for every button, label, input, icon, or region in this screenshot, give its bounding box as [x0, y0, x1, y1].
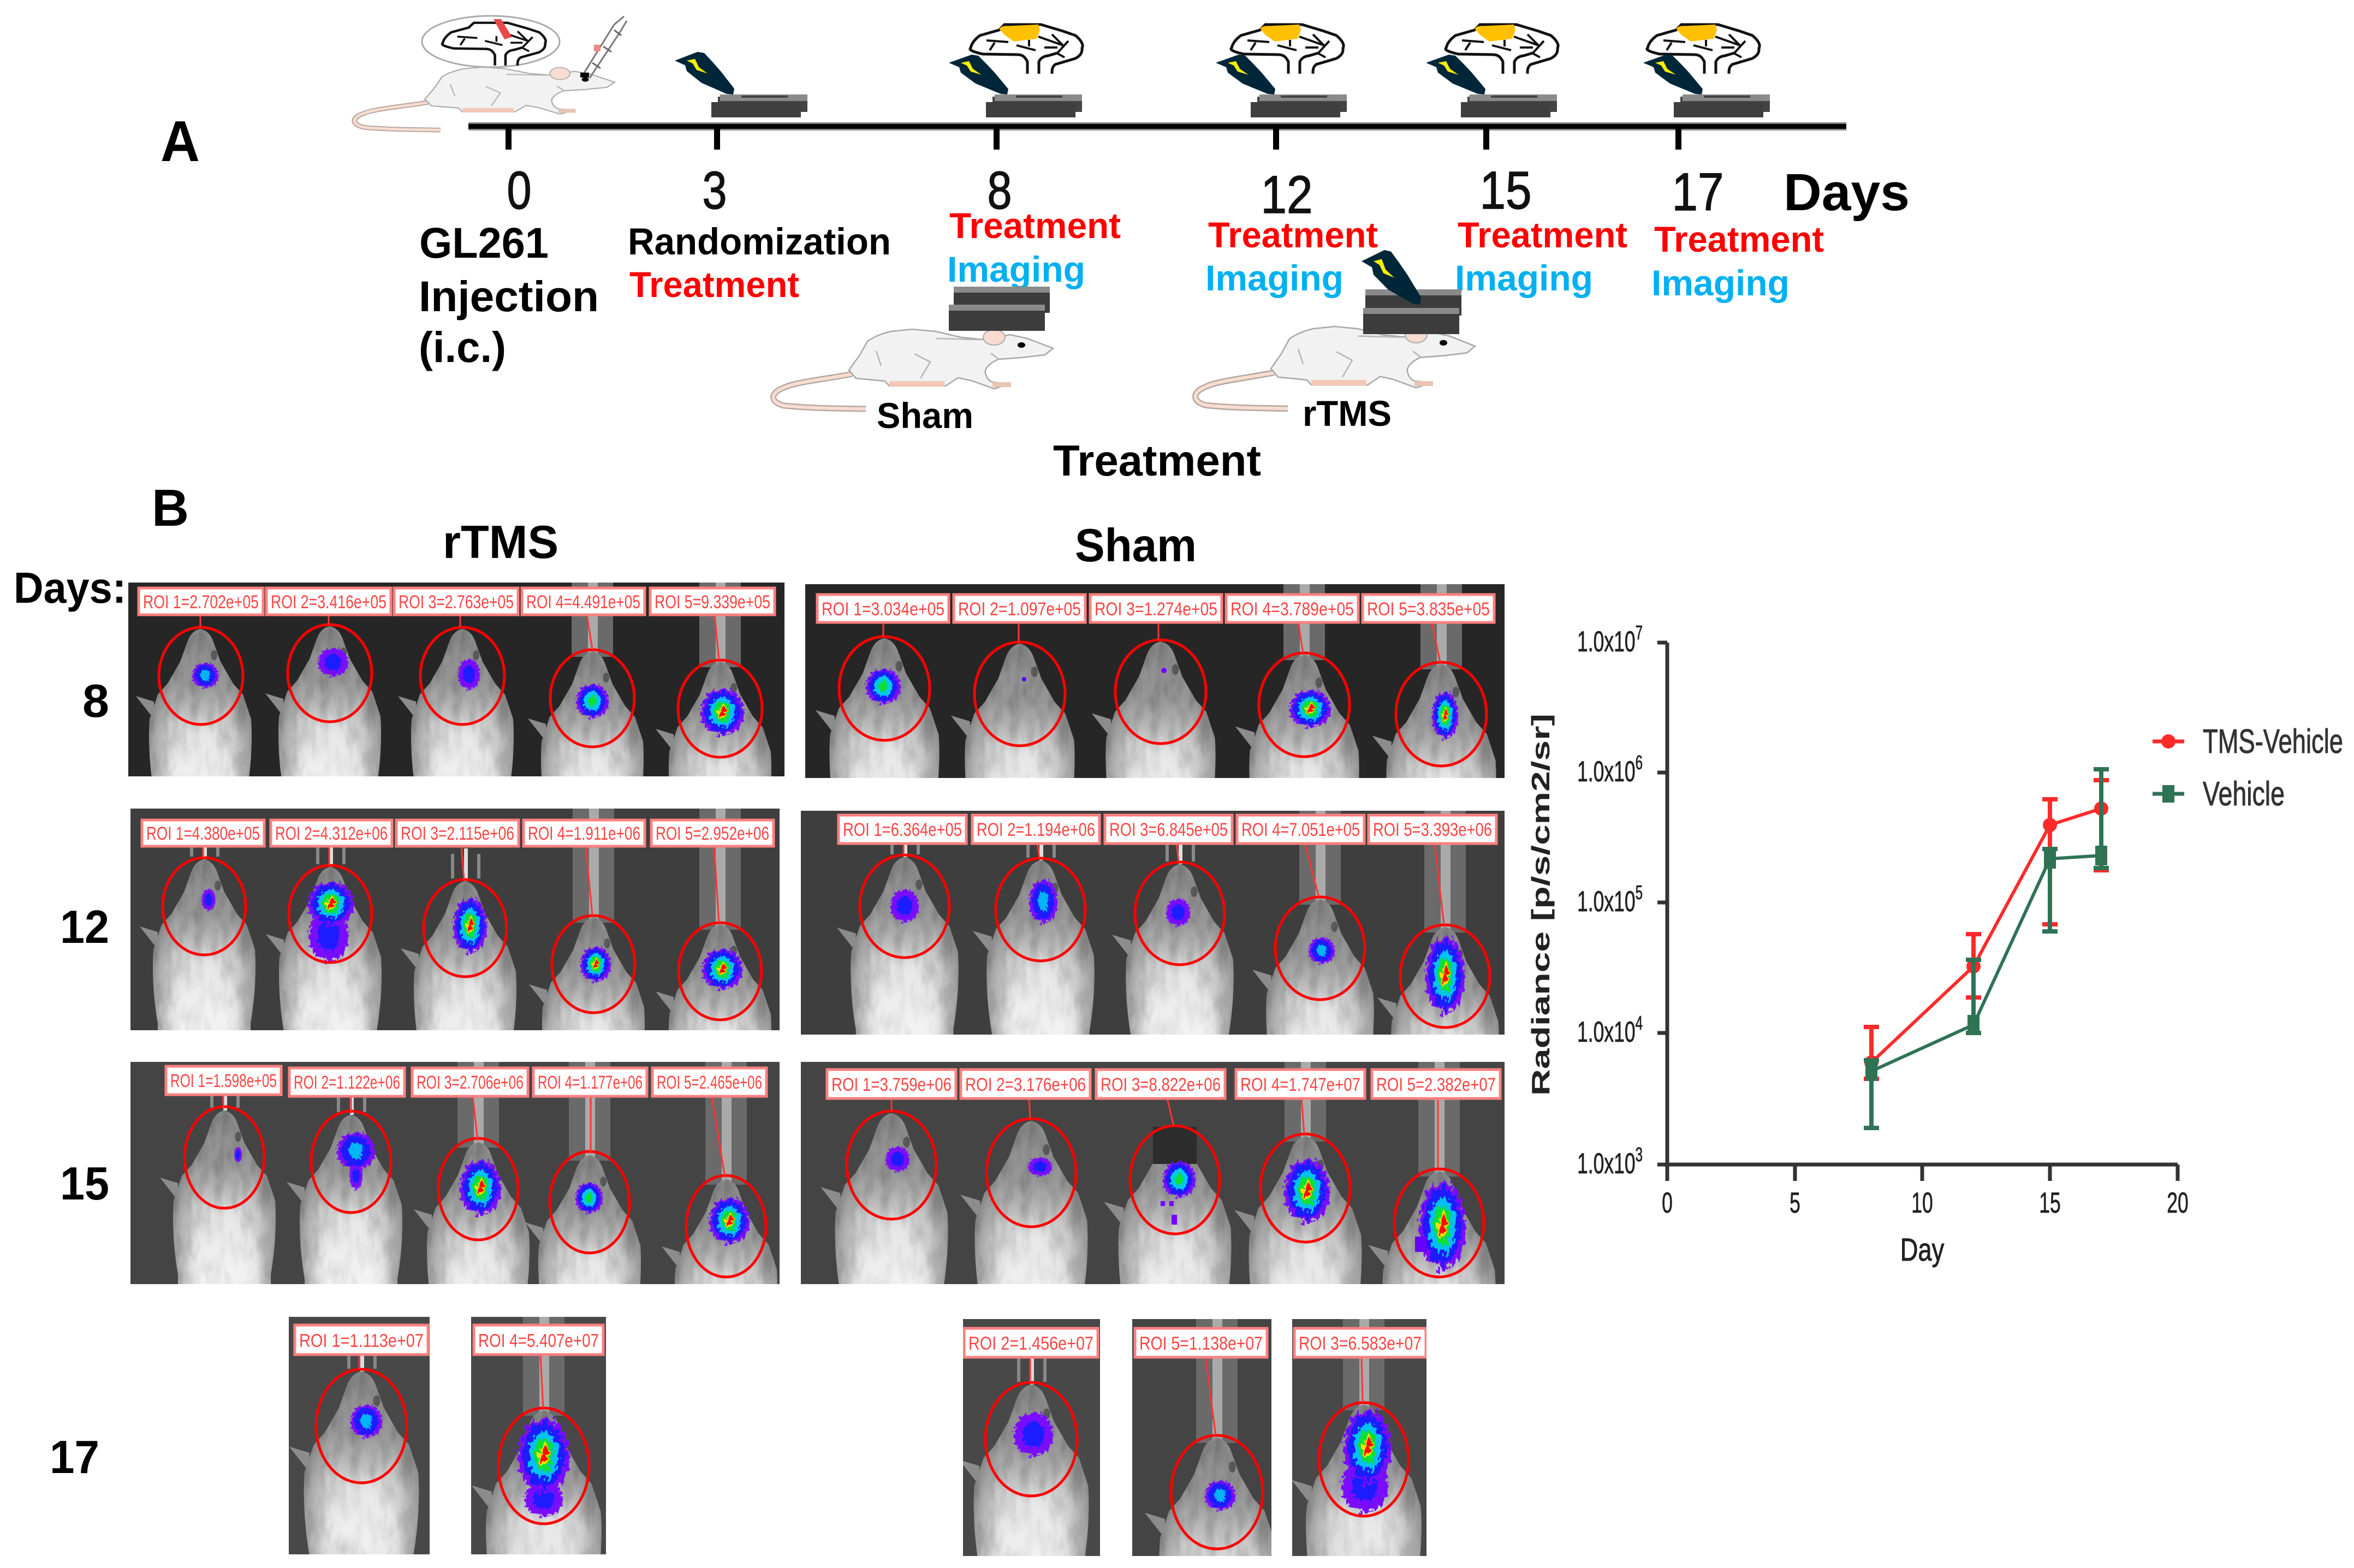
icon: rTMS mouse with coil and bolt [1195, 250, 1475, 408]
text: day 8: Imaging [947, 249, 1085, 289]
icon: coil and brain day 15 [1426, 25, 1558, 117]
series: TMS-Vehicle [1864, 780, 2109, 1079]
icon: coil and brain day 12 [1216, 25, 1347, 117]
row labels: imaging days: 8 [82, 675, 109, 727]
x tick labels: 20 [2167, 1186, 2189, 1219]
day numbers [507, 161, 1724, 224]
mouse 3 ROI [396, 820, 519, 1110]
row labels: imaging days: 12 [60, 901, 109, 953]
series: Vehicle [1864, 769, 2109, 1128]
legend [2153, 723, 2343, 813]
y tick labels: 1.0x10 [1577, 1147, 1636, 1180]
mouse 5 ROI [650, 482, 775, 891]
icon: coil and brain day 17 [1643, 25, 1770, 117]
mouse 3 ROI: ROI 3=2.763e+05 [399, 592, 514, 613]
mouse 5 ROI [1369, 747, 1499, 1168]
y axis title: Radiance [p/s/cm2/sr] [1526, 714, 1555, 1096]
mouse 3 ROI [1090, 595, 1222, 887]
mouse 1 ROI [837, 815, 966, 1098]
mouse 4 ROI [525, 975, 647, 1385]
mouse 2 ROI: ROI 2=1.194e+06 [977, 819, 1095, 840]
icon: tumour injection mouse [354, 16, 627, 130]
x axis title: Day [1900, 1233, 1944, 1268]
row labels: imaging days [50, 675, 109, 1483]
text: day 17 [1651, 219, 1824, 303]
y tick labels: 7 [1636, 622, 1643, 644]
text: day 17: Treatment [1654, 219, 1824, 259]
mouse 2 ROI [951, 595, 1085, 889]
y tick labels: 5 [1636, 882, 1643, 904]
column heading: Sham: Sham [1075, 520, 1197, 572]
day numbers: 0 [507, 161, 532, 220]
axes [1657, 643, 2178, 1181]
mouse 1 ROI: ROI 1=1.598e+05 [170, 1071, 277, 1091]
text: day 3: Randomization [628, 221, 891, 263]
heading: A: A [160, 109, 200, 174]
panel: rTMS day 17 image 2 [471, 1317, 606, 1554]
legend: Vehicle [2203, 775, 2285, 813]
text: GL261 injection: (i.c.) [419, 323, 506, 371]
mouse 3 ROI [1105, 815, 1234, 1105]
mouse 5 ROI [651, 744, 774, 1154]
mouse 3 ROI: ROI 3=1.274e+05 [1095, 599, 1217, 620]
text: day 12: Treatment [1208, 215, 1378, 255]
mouse 2 ROI [265, 588, 391, 856]
text: GL261 injection: Injection [419, 272, 599, 320]
text: day 17: Imaging [1651, 263, 1790, 303]
panel: rTMS day 12 images [130, 809, 780, 1030]
mouse 4 ROI [524, 737, 645, 1147]
mouse 4 ROI: ROI 4=3.789e+05 [1230, 599, 1354, 620]
y tick labels: 1.0x10 [1577, 885, 1636, 918]
mouse 1 ROI: ROI 1=6.364e+05 [843, 819, 962, 840]
panel: Sham day 15 images [801, 1062, 1505, 1284]
text: GL261 injection: GL261 [419, 218, 549, 267]
icon: sham mouse with coil [773, 287, 1053, 409]
panel: rTMS day 17 image 1 [289, 1317, 430, 1554]
mouse 2 ROI: ROI 2=3.176e+06 [965, 1074, 1086, 1095]
caption: Treatment: Treatment [1053, 436, 1261, 485]
panel: Sham day 17 image 1 [963, 1319, 1100, 1556]
text: day 8: Treatment [949, 205, 1121, 246]
text: day 15 [1455, 215, 1627, 298]
text: GL261 injection [419, 218, 599, 371]
mouse 4 ROI: ROI 4=1.177e+06 [538, 1072, 643, 1093]
mouse 4 ROI: ROI 4=1.747e+07 [1240, 1074, 1360, 1095]
x tick labels: 15 [2039, 1186, 2061, 1219]
mouse 5 ROI [1368, 991, 1500, 1423]
panel: rTMS day 15 images [130, 1062, 780, 1284]
mouse 2 ROI [266, 820, 392, 1096]
panel: Sham day 12 images [801, 811, 1505, 1035]
y tick labels: 1.0x10 [1577, 625, 1636, 658]
mouse 1 ROI: ROI 1=2.702e+05 [143, 592, 259, 613]
mouse 3 ROI: ROI 3=8.822e+06 [1101, 1074, 1221, 1095]
x tick labels: 10 [1911, 1186, 1933, 1219]
day numbers: 8 [987, 161, 1012, 220]
label: rTMS: rTMS [1303, 393, 1392, 433]
mouse 1 ROI [136, 588, 263, 858]
chart: radiance over days [1526, 622, 2343, 1268]
mouse 4 ROI: ROI 4=4.491e+05 [526, 592, 640, 613]
column heading: rTMS: rTMS [443, 516, 558, 568]
text: day 12 [1205, 215, 1378, 298]
mouse 3 ROI: ROI 3=2.115e+06 [401, 823, 514, 844]
mouse 1 ROI [160, 1066, 281, 1340]
text: day 12: Imaging [1205, 258, 1344, 298]
mouse 1 ROI: ROI 1=3.034e+05 [822, 599, 944, 620]
mouse 3 ROI: ROI 3=2.706e+06 [417, 1072, 524, 1093]
panel: Sham day 17 image 3 [1292, 1319, 1426, 1556]
label: Sham: Sham [877, 395, 973, 436]
mouse 5 ROI [1363, 484, 1496, 909]
y tick labels: 6 [1636, 752, 1643, 774]
y tick labels [1577, 622, 1643, 1180]
mouse 2 ROI [960, 1070, 1090, 1373]
mouse 1 ROI: ROI 1=3.759e+06 [831, 1074, 952, 1095]
mouse 3 ROI: ROI 3=6.845e+05 [1109, 819, 1228, 840]
mouse 1 ROI [816, 595, 949, 883]
text: day 15: Imaging [1455, 258, 1593, 298]
row labels: imaging days: 15 [60, 1158, 109, 1210]
panel A: experimental timeline [160, 16, 1910, 485]
y tick labels: 3 [1636, 1144, 1643, 1166]
mouse 2 ROI: ROI 2=1.097e+05 [958, 599, 1081, 620]
mouse 1 ROI [140, 820, 264, 1089]
icon: coil and brain day 8 [949, 25, 1083, 117]
y tick labels: 1.0x10 [1577, 1015, 1636, 1048]
heading: B: B [152, 479, 189, 537]
day numbers: 15 [1479, 161, 1532, 220]
day numbers: 17 [1672, 162, 1724, 222]
x tick labels [1662, 1186, 2189, 1219]
text: day 3: Treatment [629, 264, 799, 305]
mouse 5 ROI [652, 999, 777, 1409]
day numbers: 3 [702, 161, 727, 220]
mouse 1 ROI [821, 1070, 956, 1365]
mouse 4 ROI [1234, 956, 1365, 1388]
axis unit: Days: Days [1784, 163, 1910, 222]
mouse 2 ROI: ROI 2=3.416e+05 [271, 592, 387, 613]
mouse 3 ROI [412, 962, 530, 1371]
icon: coil day 3 [675, 52, 807, 117]
panel: rTMS day 8 images [128, 583, 784, 776]
panel: Sham day 8 images [805, 584, 1505, 778]
mouse 4 ROI: ROI 4=1.911e+06 [528, 823, 640, 844]
day numbers: 12 [1261, 165, 1312, 224]
text: day 3 [628, 221, 891, 305]
mouse 4 ROI: ROI 4=7.051e+05 [1241, 819, 1360, 840]
mouse 4 ROI [522, 471, 645, 881]
mouse 3 ROI [394, 588, 518, 858]
x tick labels: 0 [1662, 1186, 1673, 1219]
mouse 2 ROI [287, 1068, 405, 1344]
x tick labels: 5 [1790, 1186, 1800, 1219]
mouse 2 ROI: ROI 2=4.312e+06 [275, 823, 388, 844]
mouse 2 ROI: ROI 2=1.122e+06 [294, 1072, 400, 1093]
mouse 3 ROI [1096, 1070, 1231, 1380]
y tick labels: 1.0x10 [1577, 755, 1636, 788]
mouse 4 ROI [1226, 474, 1359, 900]
mouse 2 ROI [972, 815, 1099, 1101]
timeline axis [468, 122, 1846, 150]
row heading: Days: Days: [14, 563, 126, 612]
row labels: imaging days: 17 [50, 1432, 99, 1483]
mouse 4 ROI [1237, 719, 1374, 1140]
panel: Sham day 17 image 2 [1132, 1319, 1271, 1556]
text: day 8 [947, 205, 1121, 289]
text: day 15: Treatment [1458, 215, 1627, 255]
mouse 1 ROI: ROI 1=4.380e+05 [146, 823, 260, 844]
y tick labels: 4 [1636, 1012, 1643, 1034]
